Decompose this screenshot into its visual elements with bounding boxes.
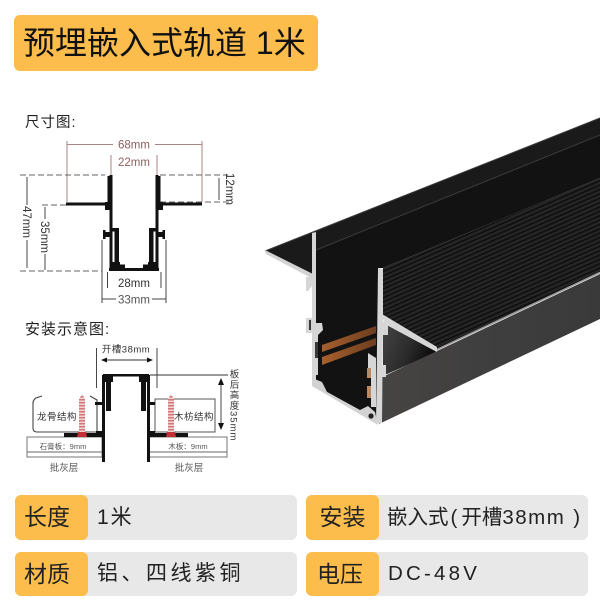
dimension labels: 12mm bbox=[223, 173, 235, 205]
groove highlight bbox=[316, 135, 600, 250]
product photo: black recessed track bbox=[265, 118, 600, 425]
labels: 木枋结构 bbox=[174, 411, 214, 423]
vertical label: 板后高度35mm bbox=[228, 368, 239, 441]
spec row: length bbox=[15, 495, 297, 540]
right board bbox=[149, 437, 227, 457]
rear edge highlight bbox=[265, 118, 600, 251]
left flange underside bbox=[265, 250, 313, 279]
spec row: material: 铝、四线紫铜 bbox=[97, 562, 244, 585]
labels: 批灰层 bbox=[175, 462, 203, 474]
chart: cross-section dimension drawing bbox=[20, 140, 235, 306]
spec row: voltage: DC-48V bbox=[388, 562, 480, 585]
dimension labels: 22mm bbox=[118, 157, 150, 169]
left keel channel bbox=[33, 396, 97, 432]
spec row: length: 长度 bbox=[24, 504, 70, 530]
labels bbox=[37, 344, 214, 474]
left board bbox=[27, 437, 102, 457]
spec row: installation: 嵌入式(开槽38mm ) bbox=[387, 506, 580, 529]
fin underside bbox=[383, 323, 437, 374]
spec row: length: 1米 bbox=[97, 506, 134, 529]
spec row: material bbox=[15, 552, 297, 596]
dimension labels bbox=[20, 140, 235, 306]
heading: installation diagram: 安装示意图: bbox=[25, 320, 110, 338]
ribbed right flange bbox=[383, 178, 600, 349]
labels: 批灰层 bbox=[50, 462, 78, 474]
chart: installation diagram bbox=[27, 344, 239, 474]
right wooden block bbox=[155, 399, 215, 432]
title banner: 预埋嵌入式轨道 1米 bbox=[23, 25, 306, 61]
silver cut face, right wall bbox=[368, 268, 437, 424]
right clip copper contacts bbox=[367, 368, 371, 398]
dimension labels: 35mm bbox=[38, 221, 50, 253]
spec row: installation bbox=[306, 495, 588, 540]
outer side face bbox=[379, 274, 600, 424]
screws bbox=[77, 394, 176, 437]
dimension lines bbox=[96, 348, 228, 427]
mounting plates bbox=[64, 433, 188, 437]
fin light edge bbox=[437, 272, 600, 350]
arrowheads bbox=[101, 358, 224, 430]
heading: dimension drawing: 尺寸图: bbox=[25, 114, 77, 131]
profile right half bbox=[143, 175, 202, 271]
silver bottom band bbox=[312, 378, 378, 425]
dimension labels: 28mm bbox=[118, 278, 150, 290]
spec row: voltage bbox=[306, 552, 588, 596]
labels: 开槽38mm bbox=[102, 344, 150, 356]
spec row: installation: 安装 bbox=[320, 504, 366, 530]
dimension labels: 68mm bbox=[118, 140, 150, 152]
profile left half bbox=[66, 175, 159, 271]
dimension labels: 47mm bbox=[20, 206, 32, 238]
dimension lines and dashes bbox=[20, 141, 233, 303]
spec row: voltage: 电压 bbox=[317, 561, 363, 587]
labels: 龙骨结构 bbox=[37, 411, 77, 423]
bottom screw hole bbox=[368, 413, 374, 419]
spec row: material: 材质 bbox=[24, 561, 70, 587]
left clip details bbox=[309, 320, 320, 385]
dimension labels: 33mm bbox=[118, 294, 150, 306]
labels: 木板：9mm bbox=[168, 441, 208, 451]
title banner bbox=[14, 15, 318, 71]
labels: 石膏板：9mm bbox=[40, 441, 86, 451]
top flange surface bbox=[265, 118, 600, 276]
copper conductors bbox=[322, 326, 376, 365]
track profile bbox=[95, 374, 155, 462]
silver cut face, left wall bbox=[306, 232, 323, 386]
back flange and wall bbox=[265, 118, 600, 421]
